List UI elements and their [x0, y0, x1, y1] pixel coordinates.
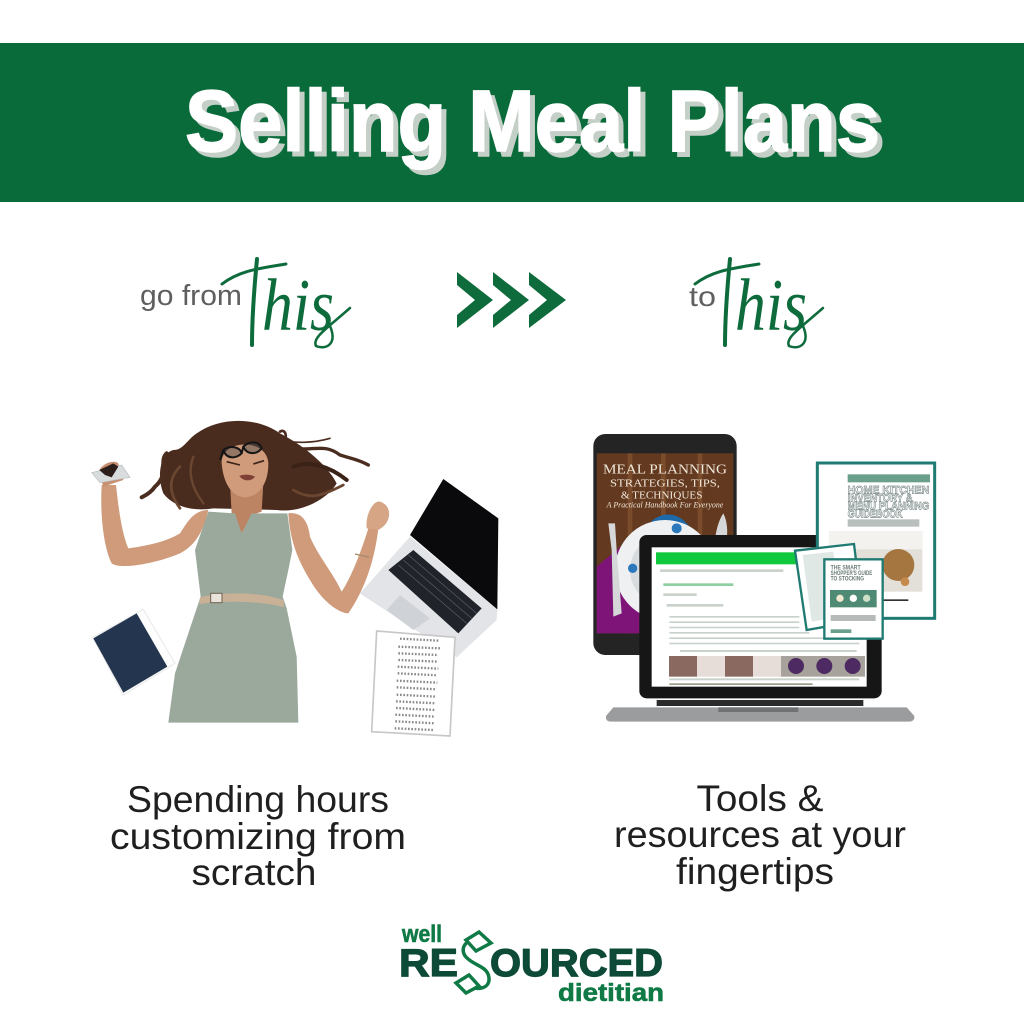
phone in hand	[92, 465, 130, 483]
heading: go from this: his	[262, 265, 334, 347]
logo: well resourced dietitian: RE	[399, 942, 458, 985]
caption: right: Tools &	[696, 778, 824, 819]
caption: left: scratch	[192, 852, 316, 893]
guidebook page: HOME KITCHEN	[848, 484, 929, 496]
printed paper	[372, 631, 455, 736]
heading: to this	[689, 259, 823, 347]
logo: well resourced dietitian: OURCED	[490, 942, 663, 985]
guidebook page: INVENTORY &	[848, 493, 913, 505]
dress	[168, 512, 298, 723]
tablet: meal planning book: & TECHNIQUES	[621, 489, 702, 501]
small guide pages: THE SMART	[831, 564, 861, 571]
tablet: meal planning book: STRATEGIES, TIPS,	[610, 478, 720, 490]
tablet: meal planning book	[593, 434, 737, 655]
hair	[142, 421, 368, 511]
heading: to this: his	[735, 265, 807, 347]
arrows: three chevrons	[457, 272, 566, 328]
guidebook page: GUIDEBOOK	[848, 508, 903, 520]
caption: right: fingertips	[676, 851, 834, 892]
tablet: meal planning book: MEAL PLANNING	[603, 461, 727, 476]
heading: go from this: go from	[140, 280, 242, 312]
logo S mark	[456, 932, 491, 993]
illustration: laptop, tablet and guides	[593, 434, 935, 722]
caption: left: Spending hours	[127, 779, 389, 820]
caption: right	[614, 778, 906, 892]
small guide pages: TO STOCKING	[831, 576, 864, 583]
logo: well resourced dietitian: dietitian	[558, 979, 664, 1007]
title banner: Selling Meal Plans	[185, 73, 880, 170]
laptop	[360, 537, 497, 657]
logo: well resourced dietitian: well	[401, 921, 442, 948]
logo: well resourced dietitian	[399, 921, 664, 1007]
small guide pages: SHOPPER'S GUIDE	[831, 570, 872, 577]
laptop screen: meal planner app	[639, 535, 882, 698]
left arm and hand	[101, 485, 208, 566]
guidebook page	[817, 463, 935, 618]
guidebook page: MENU PLANNING	[848, 500, 929, 512]
caption: right: resources at your	[614, 814, 906, 855]
caption: left	[110, 779, 406, 893]
glasses on forehead	[220, 442, 262, 460]
neck and face	[230, 483, 263, 533]
right arm and hand	[288, 513, 378, 613]
heading: to this: to	[689, 281, 716, 312]
illustration: overwhelmed woman with devices	[92, 421, 498, 736]
tablet	[93, 609, 175, 695]
laptop base	[606, 707, 914, 722]
caption: left: customizing from	[110, 816, 406, 857]
belt	[199, 593, 284, 607]
tablet: meal planning book: A Practical Handbook For Everyone	[606, 501, 724, 510]
small guide pages	[795, 544, 883, 639]
title banner	[0, 43, 1024, 202]
heading: go from this	[140, 259, 350, 347]
title banner: Selling Meal Plans	[190, 78, 885, 175]
